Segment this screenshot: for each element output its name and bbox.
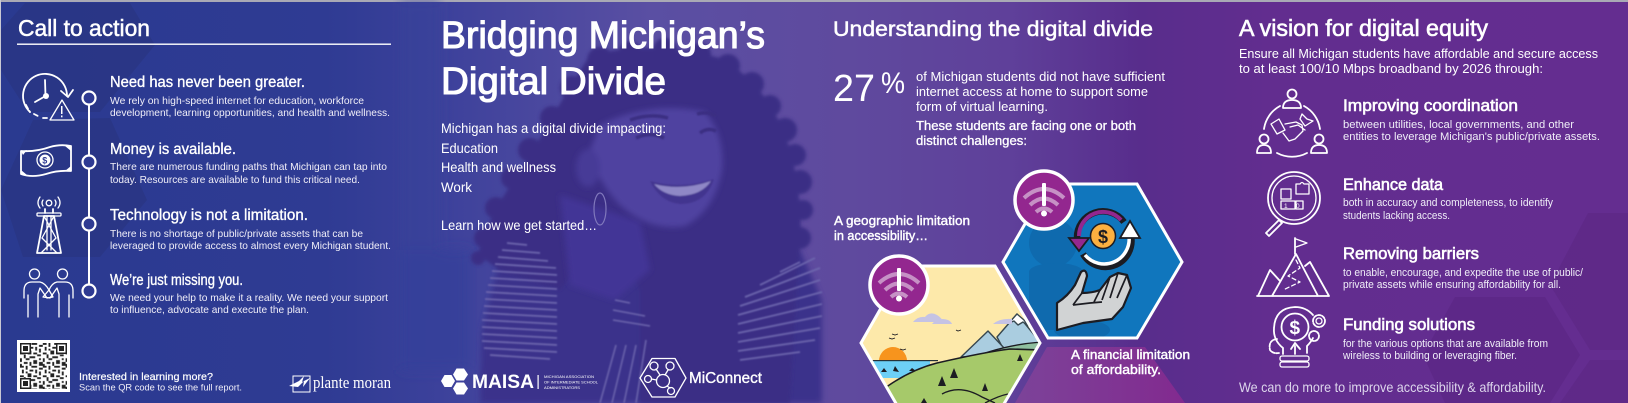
timeline nodes (82, 92, 96, 298)
icon: lightbulb with dollar and gears (1270, 307, 1325, 367)
photo: woman smiling (400, 0, 822, 403)
heading rule (17, 44, 391, 45)
photo: hair (471, 38, 813, 403)
text block: money is available: Money is available. (110, 141, 236, 158)
photo: neck and torso (480, 215, 822, 403)
icon: handshake and people (1257, 90, 1327, 157)
logo: MAISA: MICHIGAN ASSOCIATION (544, 374, 594, 379)
text block: removing barriers: Removing barriers (1343, 245, 1479, 263)
icon: magnifier with puzzle: 0 (1296, 203, 1300, 210)
panel: title (441, 15, 765, 397)
sun (879, 347, 907, 360)
logo: MiConnect (640, 358, 763, 397)
photo: soft background blocks (400, 0, 470, 370)
text block: we are just missing you: to influence, advocate and execute the plan. (110, 304, 309, 316)
text block: need has never been greater: development, learning opportunities, and health and wellness. (110, 107, 390, 119)
statistic: 27 percent (833, 67, 905, 110)
heading: understanding the digital divide: Understanding the digital divide (833, 17, 1153, 41)
geographic limitation hexagon (861, 266, 1042, 403)
text block: digital divide impacts: Learn how we get started… (441, 217, 597, 233)
green hill (880, 349, 1042, 403)
text block: financial limitation: of affordability. (1071, 362, 1161, 377)
text block: statistic description (916, 70, 1166, 114)
financial limitation hexagon (1003, 184, 1182, 340)
badge: wifi alert on geographic hexagon (870, 256, 928, 314)
icon: money bill: $ (42, 156, 47, 166)
text block: funding solutions: for the various options that are available from (1343, 338, 1548, 350)
landscape illustration (870, 313, 1042, 403)
icon: two people holding hands (24, 269, 73, 317)
logo: plante moran: plante moran (313, 373, 391, 392)
icon: circular money arrows (1069, 211, 1140, 267)
text block: technology is not a limitation: leveraged to provide access to almost every Michigan student. (110, 240, 391, 252)
hill lines (942, 390, 1008, 403)
icon: clock with warning (23, 74, 74, 120)
text block: geographic limitation: A geographic limitation (834, 213, 970, 228)
text block: vision statement: to at least 100/10 Mbps broadband by 2026 through: (1239, 61, 1543, 76)
text block: technology is not a limitation: There is no shortage of public/private assets that can be (110, 228, 363, 240)
panel: vision for digital equity (1239, 15, 1600, 395)
text block: digital divide impacts: Work (441, 179, 473, 195)
QR code (17, 340, 70, 392)
upper left hexagon background decoration (1, 3, 155, 112)
right hexagon background decoration (1423, 297, 1580, 403)
photo: face (576, 108, 722, 227)
title: Bridging Michigan’s (441, 15, 765, 57)
icon: mountain with flag (1257, 238, 1329, 296)
text block: money is available: today. Resources are available to fund this critical need. (110, 174, 360, 186)
text block: technology is not a limitation: Technology is not a limitation. (110, 207, 308, 224)
lower left hexagon background decoration (1, 118, 147, 257)
badge: wifi alert on financial hexagon (1015, 171, 1073, 229)
logo: MiConnect: MiConnect (689, 370, 763, 387)
timeline line (88, 104, 90, 285)
text block: learn more: Scan the QR code to see the full report. (79, 382, 242, 394)
logo: MAISA: MAISA (472, 372, 534, 393)
text block: learn more (79, 371, 242, 394)
icon: circular money arrows: $ (1098, 227, 1108, 247)
icon: money bill (21, 145, 71, 176)
text block: statistic description: internet access at home to support some (916, 85, 1148, 99)
text block: digital divide impacts (441, 120, 666, 233)
timeline (82, 92, 96, 298)
text block: improving coordination (1343, 97, 1600, 143)
text block: funding solutions: Funding solutions (1343, 316, 1475, 334)
mountains (961, 314, 1040, 357)
photo: shirt left sleeve stripes (482, 243, 557, 359)
title (441, 15, 765, 103)
far right hexagon background decoration (1550, 213, 1628, 350)
top edge (0, 0, 1628, 2)
photo: eyes and brows (630, 113, 716, 138)
text block: removing barriers: to enable, encourage, and expedite the use of public/ (1343, 267, 1584, 279)
trees (921, 354, 1023, 403)
text block: distinct challenges: These students are facing one or both (916, 119, 1136, 133)
photo: smile (650, 179, 714, 204)
clouds (913, 313, 1012, 324)
text block: enhance data: students lacking access. (1343, 210, 1450, 222)
closing statement: We can do more to improve accessibility & affordability. (1239, 379, 1546, 395)
heading: vision for digital equity: A vision for digital equity (1239, 15, 1488, 41)
text block: enhance data (1343, 176, 1553, 222)
lower magenta hexagon decoration (1015, 347, 1185, 403)
text block: distinct challenges: distinct challenges: (916, 134, 1027, 148)
text block: technology is not a limitation (110, 207, 391, 252)
photo: shirt center stripes (600, 300, 650, 403)
logo: MAISA: ADMINISTRATORS (544, 385, 580, 390)
logo: MAISA (441, 368, 599, 394)
photo: neck (560, 195, 650, 300)
text block: we are just missing you: We need your help to make it a reality. We need your support (110, 292, 388, 304)
text block: need has never been greater: Need has never been greater. (110, 74, 305, 91)
text block: geographic limitation: in accessibility… (834, 228, 928, 243)
icon: open hand (1057, 271, 1131, 330)
panel: call to action (17, 15, 391, 394)
text block: improving coordination: between utilities, local governments, and other (1343, 119, 1574, 131)
icon: lightbulb with dollar and gears: $ (1290, 318, 1300, 339)
text block: digital divide impacts: Health and wellness (441, 159, 556, 175)
far hill (985, 342, 1038, 352)
text block: removing barriers: private assets while ensuring affordability for all. (1343, 279, 1561, 291)
text block: financial limitation (1071, 347, 1190, 377)
panel: understanding the digital divide (833, 17, 1190, 403)
text block: need has never been greater: We rely on high-speed internet for education, workforce (110, 95, 364, 107)
text block: money is available (110, 141, 387, 186)
text block: digital divide impacts: Michigan has a digital divide impacting: (441, 120, 666, 136)
title: Digital Divide (441, 61, 666, 103)
logo: plante moran (289, 373, 391, 392)
text block: funding solutions (1342, 316, 1548, 362)
heading: call to action: Call to action (18, 15, 150, 41)
text block: we are just missing you: We’re just missing you. (110, 272, 243, 289)
text block: geographic limitation (834, 213, 970, 243)
village (881, 366, 916, 372)
icon: cell tower (37, 197, 61, 253)
text block: vision statement (1239, 46, 1598, 76)
photo: earring (594, 193, 606, 225)
left edge (0, 0, 1, 403)
statistic: 27 percent: % (881, 67, 905, 100)
icon: magnifier with puzzle: 1 (1284, 203, 1288, 210)
coin stack watermark (1029, 219, 1110, 340)
text block: enhance data: both in accuracy and completeness, to identify (1343, 197, 1553, 209)
text block: improving coordination: entities to leverage Michigan's public/private assets. (1343, 131, 1600, 143)
text block: removing barriers (1343, 245, 1584, 291)
text block: distinct challenges (916, 119, 1136, 148)
text block: funding solutions: wireless to building or leveraging fiber. (1342, 350, 1517, 362)
icon: magnifier with puzzle (1266, 172, 1320, 236)
text block: we are just missing you (110, 272, 388, 316)
text block: statistic description: form of virtual learning. (916, 100, 1048, 114)
text block: learn more: Interested in learning more? (79, 371, 213, 383)
statistic: 27 percent: 27 (833, 68, 875, 110)
photo: shirt right sleeve stripes (738, 258, 822, 360)
text block: financial limitation: A financial limitation (1071, 347, 1190, 362)
bottom right hexagon background decoration (1560, 360, 1628, 403)
text block: improving coordination: Improving coordination (1343, 97, 1518, 115)
text block: enhance data: Enhance data (1343, 176, 1444, 194)
text block: vision statement: Ensure all Michigan students have affordable and secure access (1239, 46, 1598, 61)
text block: digital divide impacts: Education (441, 140, 498, 156)
text block: statistic description: of Michigan students did not have sufficient (916, 70, 1166, 84)
text block: money is available: There are numerous funding paths that Michigan can tap into (110, 161, 387, 173)
birds (889, 330, 961, 350)
text block: need has never been greater (110, 74, 390, 119)
lake (873, 361, 930, 378)
logo: MAISA: OF INTERMEDIATE SCHOOL (544, 380, 599, 384)
